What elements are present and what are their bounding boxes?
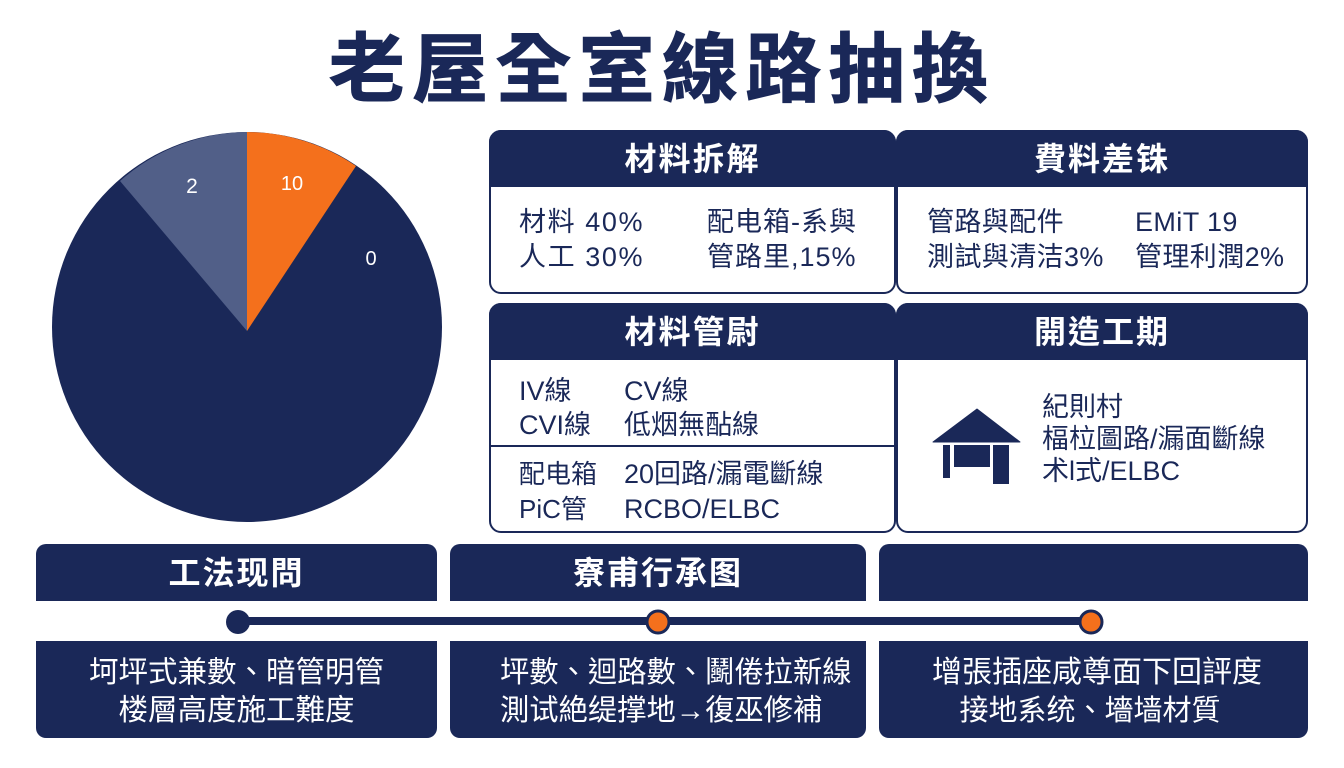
text: items right: 管理利潤2%: [1135, 242, 1284, 272]
text: items right: [1135, 207, 1284, 272]
panel: steps: 測试絶缇撑地→復巫修補: [500, 694, 822, 727]
text: wire types right: CV線: [624, 376, 689, 406]
panel: 開造工期: [896, 303, 1308, 533]
text: box and pipe: [519, 459, 597, 524]
panel: additions: 增張插座咸尊面下回評度: [932, 656, 1262, 689]
panel: factors: 坷坪式兼數、暗管明管: [89, 656, 384, 689]
panel: steps: [450, 641, 866, 738]
text: cost split: 人工 30%: [519, 242, 644, 272]
panel: factors: 楼層高度施工難度: [118, 694, 354, 727]
panel: steps: 坪數、迴路數、鬬倦拉新線: [500, 656, 852, 689]
text: breaker: 20回路/漏電斷線: [624, 459, 824, 489]
panel: additions: [879, 641, 1308, 738]
heading: 費料差铢: [896, 130, 1308, 187]
panel: 寮甫行承图 header: [450, 544, 866, 601]
panel: 工法现問 header: [36, 544, 437, 601]
pie chart: 2: [186, 175, 198, 198]
heading: 費料差铢: 費料差铢: [1034, 141, 1170, 177]
text: items left: [927, 207, 1104, 272]
text: breaker: RCBO/ELBC: [624, 494, 780, 524]
panel: 工法现問 header: 工法现問: [168, 555, 304, 591]
heading: 材料拆解: [489, 130, 896, 187]
text: items right: EMiT 19: [1135, 207, 1238, 237]
timeline: [226, 610, 1104, 634]
panel: 材料管尉: [489, 303, 896, 533]
panel: factors: [36, 641, 437, 738]
panel: additions: 接地系统、墻墙材質: [959, 695, 1220, 727]
heading: 材料管尉: [489, 303, 896, 360]
icon: house: [932, 408, 1020, 484]
panel: 費料差铢: [896, 130, 1308, 294]
heading: 材料拆解: 材料拆解: [624, 141, 760, 177]
heading: 開造工期: 開造工期: [1034, 314, 1170, 350]
text: wire types: [519, 376, 591, 440]
text: items left: 測試與清洁3%: [927, 242, 1104, 272]
heading: 開造工期: [896, 303, 1308, 360]
panel: 材料拆解: [489, 130, 896, 294]
text: cost split: [519, 207, 644, 272]
heading: 材料管尉: 材料管尉: [624, 314, 760, 350]
panel: blank header: [879, 544, 1308, 601]
text: breaker: [624, 459, 824, 524]
text: cost split right: 管路里,15%: [707, 242, 857, 272]
text: wire types right: 低烟無酟線: [624, 410, 759, 440]
pie chart: 0: [365, 248, 377, 270]
pie chart: 10: [281, 173, 303, 195]
text: items left: 管路與配件: [927, 207, 1064, 237]
text: wire types: IV線: [519, 376, 572, 406]
title: 老屋全室線路抽換: [329, 28, 995, 113]
text: schedule: 楅柆圖路/漏面斷線: [1042, 424, 1266, 454]
text: box and pipe: 配电箱: [519, 459, 597, 489]
text: cost split: 材料 40%: [519, 207, 644, 237]
text: schedule: [1042, 392, 1266, 486]
text: cost split right: [707, 207, 857, 272]
text: schedule: 紀則村: [1042, 392, 1123, 422]
panel: 寮甫行承图 header: 寮甫行承图: [573, 555, 743, 591]
text: wire types right: [624, 376, 759, 440]
text: schedule: 术l式/ELBC: [1042, 456, 1180, 486]
text: wire types: CVI線: [519, 410, 591, 440]
text: cost split right: 配电箱-系與: [707, 207, 857, 237]
pie chart: [52, 132, 442, 522]
text: box and pipe: PiC管: [519, 494, 587, 524]
